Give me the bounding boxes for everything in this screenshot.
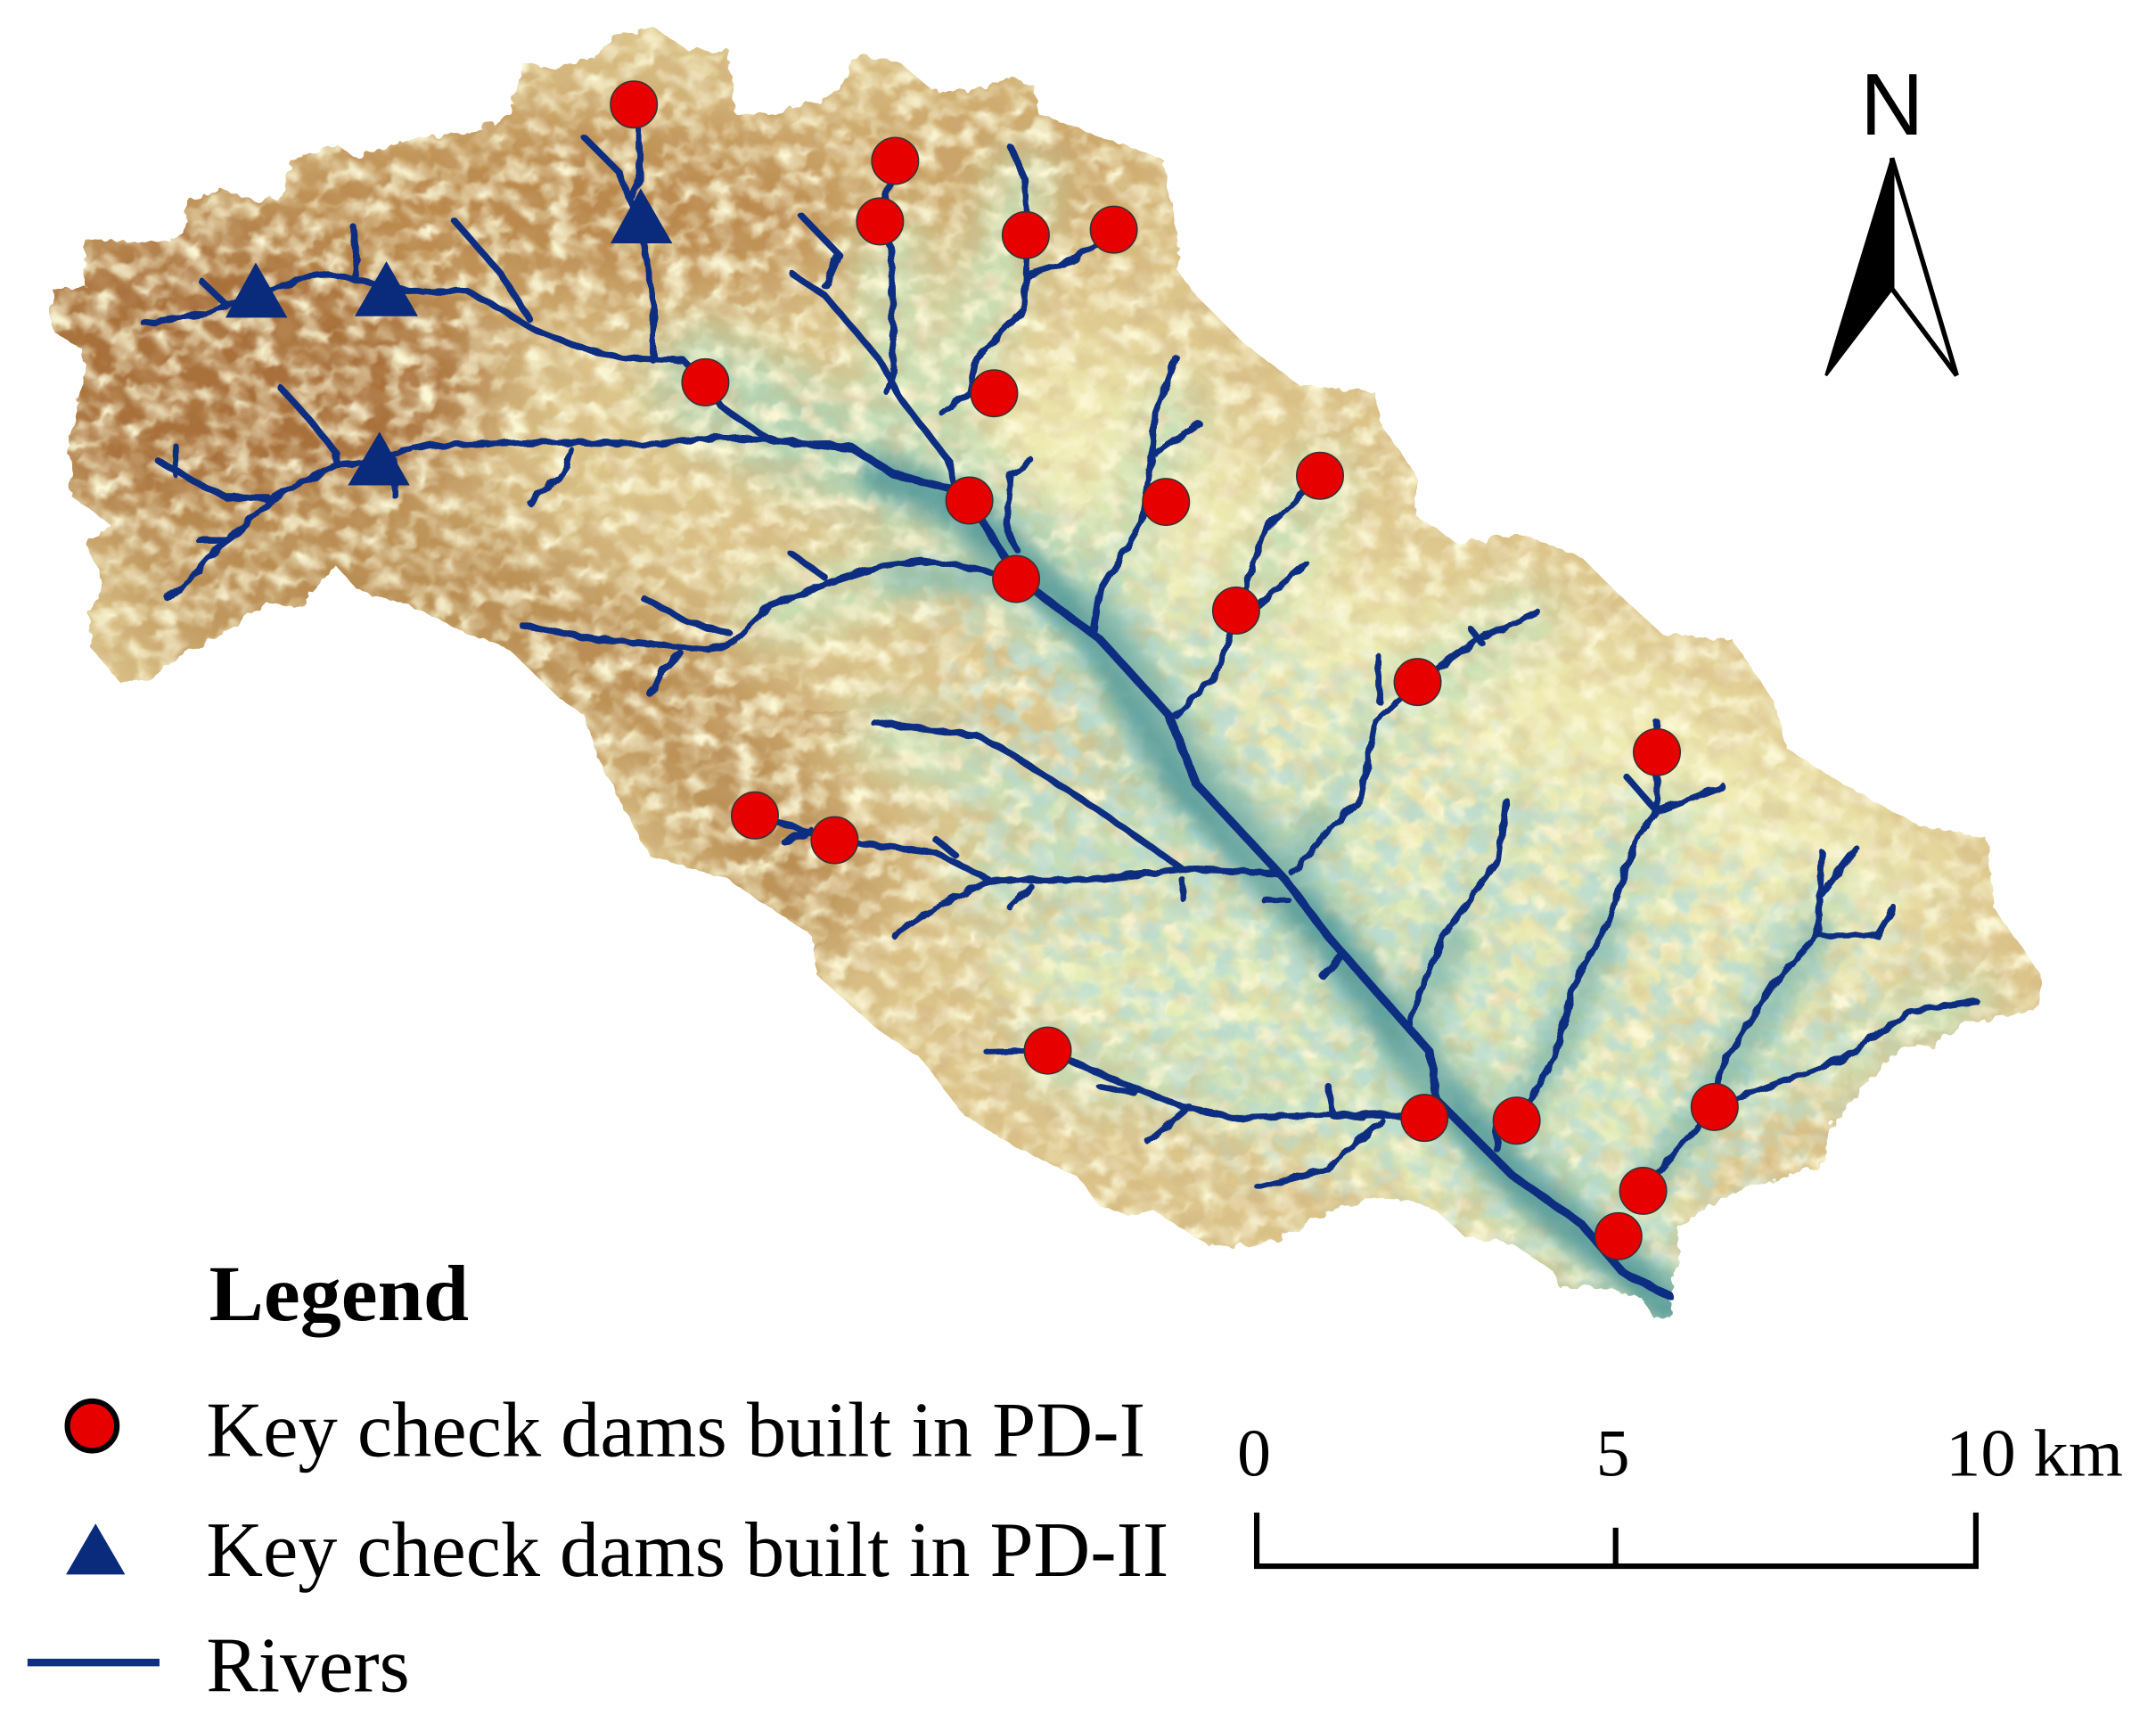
legend icon: blue triangle <box>66 1523 125 1574</box>
north arrow <box>1826 55 1956 375</box>
legend <box>28 1250 1168 1709</box>
scale label 5: 5 <box>1596 1416 1630 1490</box>
legend title: Legend <box>209 1250 469 1338</box>
north arrow: N <box>1860 55 1923 153</box>
legend icon: red circle <box>68 1401 117 1451</box>
rivers network <box>144 110 1976 1297</box>
legend label: PD-II: Key check dams built in PD-II <box>206 1507 1168 1594</box>
key check dams built in PD-II (blue triangles) <box>225 188 672 486</box>
scale label 0: 0 <box>1237 1416 1271 1490</box>
key check dams built in PD-I (red circles) <box>611 81 1738 1260</box>
watershed terrain map <box>48 27 2043 1319</box>
legend icon: river line <box>28 1660 160 1665</box>
legend label: rivers: Rivers <box>206 1622 410 1709</box>
scale label 10 km: 10 km <box>1946 1416 2123 1490</box>
scale bar <box>1237 1416 2123 1566</box>
legend label: PD-I: Key check dams built in PD-I <box>206 1388 1145 1474</box>
